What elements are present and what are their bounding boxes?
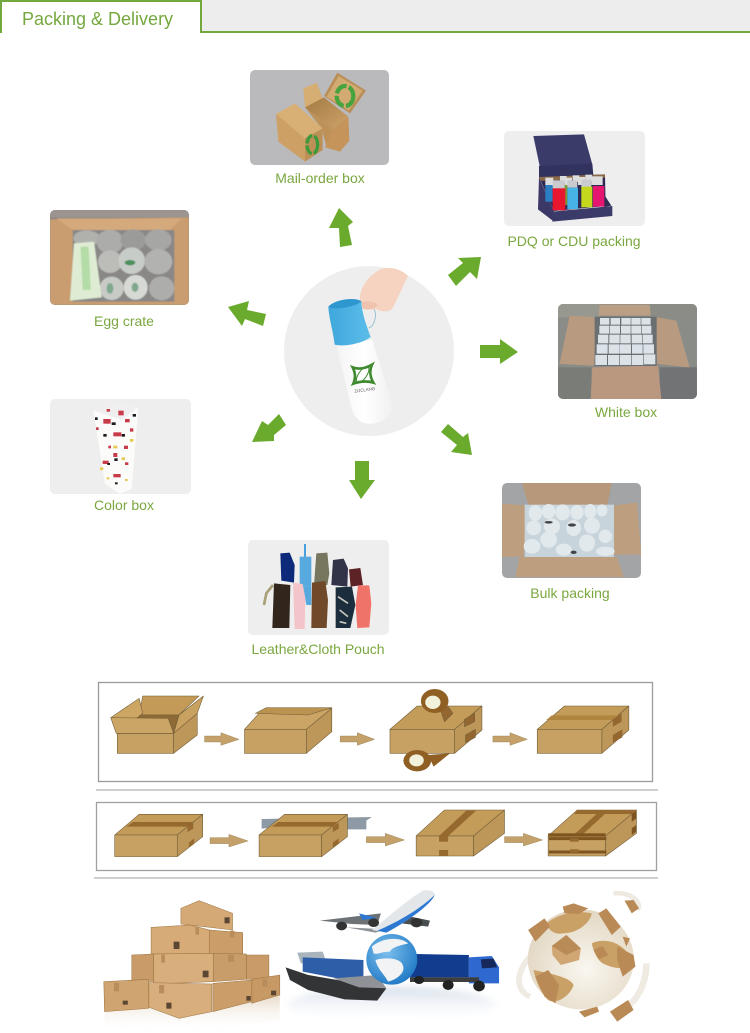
- airplane: [320, 890, 435, 933]
- panel: white box: [558, 304, 697, 420]
- cup rim: [328, 299, 361, 308]
- bottle logo: [353, 365, 373, 385]
- arrow: [340, 733, 375, 745]
- illustration: ship, plane, truck and globe: [286, 890, 499, 1023]
- arrow: to leather pouch: [349, 461, 375, 499]
- parcels: [528, 900, 639, 1022]
- box: one band: [115, 814, 203, 857]
- center circle with bottle: [284, 266, 454, 436]
- label: White box: [595, 404, 657, 420]
- label: Leather&Cloth Pouch: [251, 641, 385, 657]
- heading: Packing & Delivery: [22, 9, 173, 29]
- icon: fingers: [361, 301, 377, 310]
- label: PDQ or CDU packing: [507, 233, 641, 249]
- header tab: [1, 1, 201, 33]
- panel: leather and cloth pouch: [248, 540, 389, 657]
- box: flaps closed: [245, 708, 332, 753]
- box: open: [111, 696, 203, 753]
- panel: color box: [50, 399, 191, 513]
- arrow: to egg crate: [228, 301, 266, 326]
- label: Color box: [94, 497, 154, 513]
- cup lid: [328, 299, 371, 345]
- label: Bulk packing: [530, 585, 610, 601]
- illustration: stacked cartons: [104, 901, 280, 1032]
- delivery images: [104, 890, 646, 1032]
- icon: tape roll top: [421, 689, 449, 713]
- box: taping: [390, 706, 482, 753]
- arrow: up to mail-order box: [329, 208, 353, 247]
- box: cross tape: [416, 810, 505, 856]
- logo text: ZIJCLANG: [354, 386, 376, 394]
- header bar: [1, 0, 750, 33]
- label: Egg crate: [94, 313, 154, 329]
- label: Mail-order box: [275, 170, 365, 186]
- panel: bulk packing: [502, 483, 641, 601]
- panel: PDQ or CDU packing: [504, 131, 645, 249]
- icon: tape roll bottom: [403, 750, 450, 771]
- box: taped: [537, 706, 629, 753]
- box: on strapping bar: [259, 814, 347, 857]
- tape band: [546, 713, 622, 743]
- bottle body: [337, 339, 392, 424]
- box: full strapped: [548, 810, 636, 856]
- arrow: [205, 733, 239, 745]
- arrow: to white box: [480, 339, 518, 364]
- strapping bar: [262, 817, 372, 829]
- panel: carton sealing steps row 1: [98, 682, 652, 782]
- icon: hand: [360, 268, 408, 311]
- panel: egg crate: [50, 210, 189, 329]
- panel: carton sealing steps row 2: [96, 802, 656, 870]
- arrow: to color box: [252, 414, 286, 442]
- ship: [286, 952, 386, 1001]
- panel: mail-order box: [250, 70, 389, 186]
- truck: [410, 954, 499, 991]
- globe: [366, 934, 417, 985]
- illustration: world globe with parcels: [519, 893, 646, 1022]
- arrow: to bulk packing: [441, 424, 472, 455]
- arrow: [505, 833, 543, 846]
- arrow: [493, 733, 527, 745]
- icon: cup ring: [361, 301, 376, 328]
- arrow: [366, 833, 405, 846]
- arrow: to PDQ: [448, 257, 481, 286]
- arrow: [210, 834, 248, 847]
